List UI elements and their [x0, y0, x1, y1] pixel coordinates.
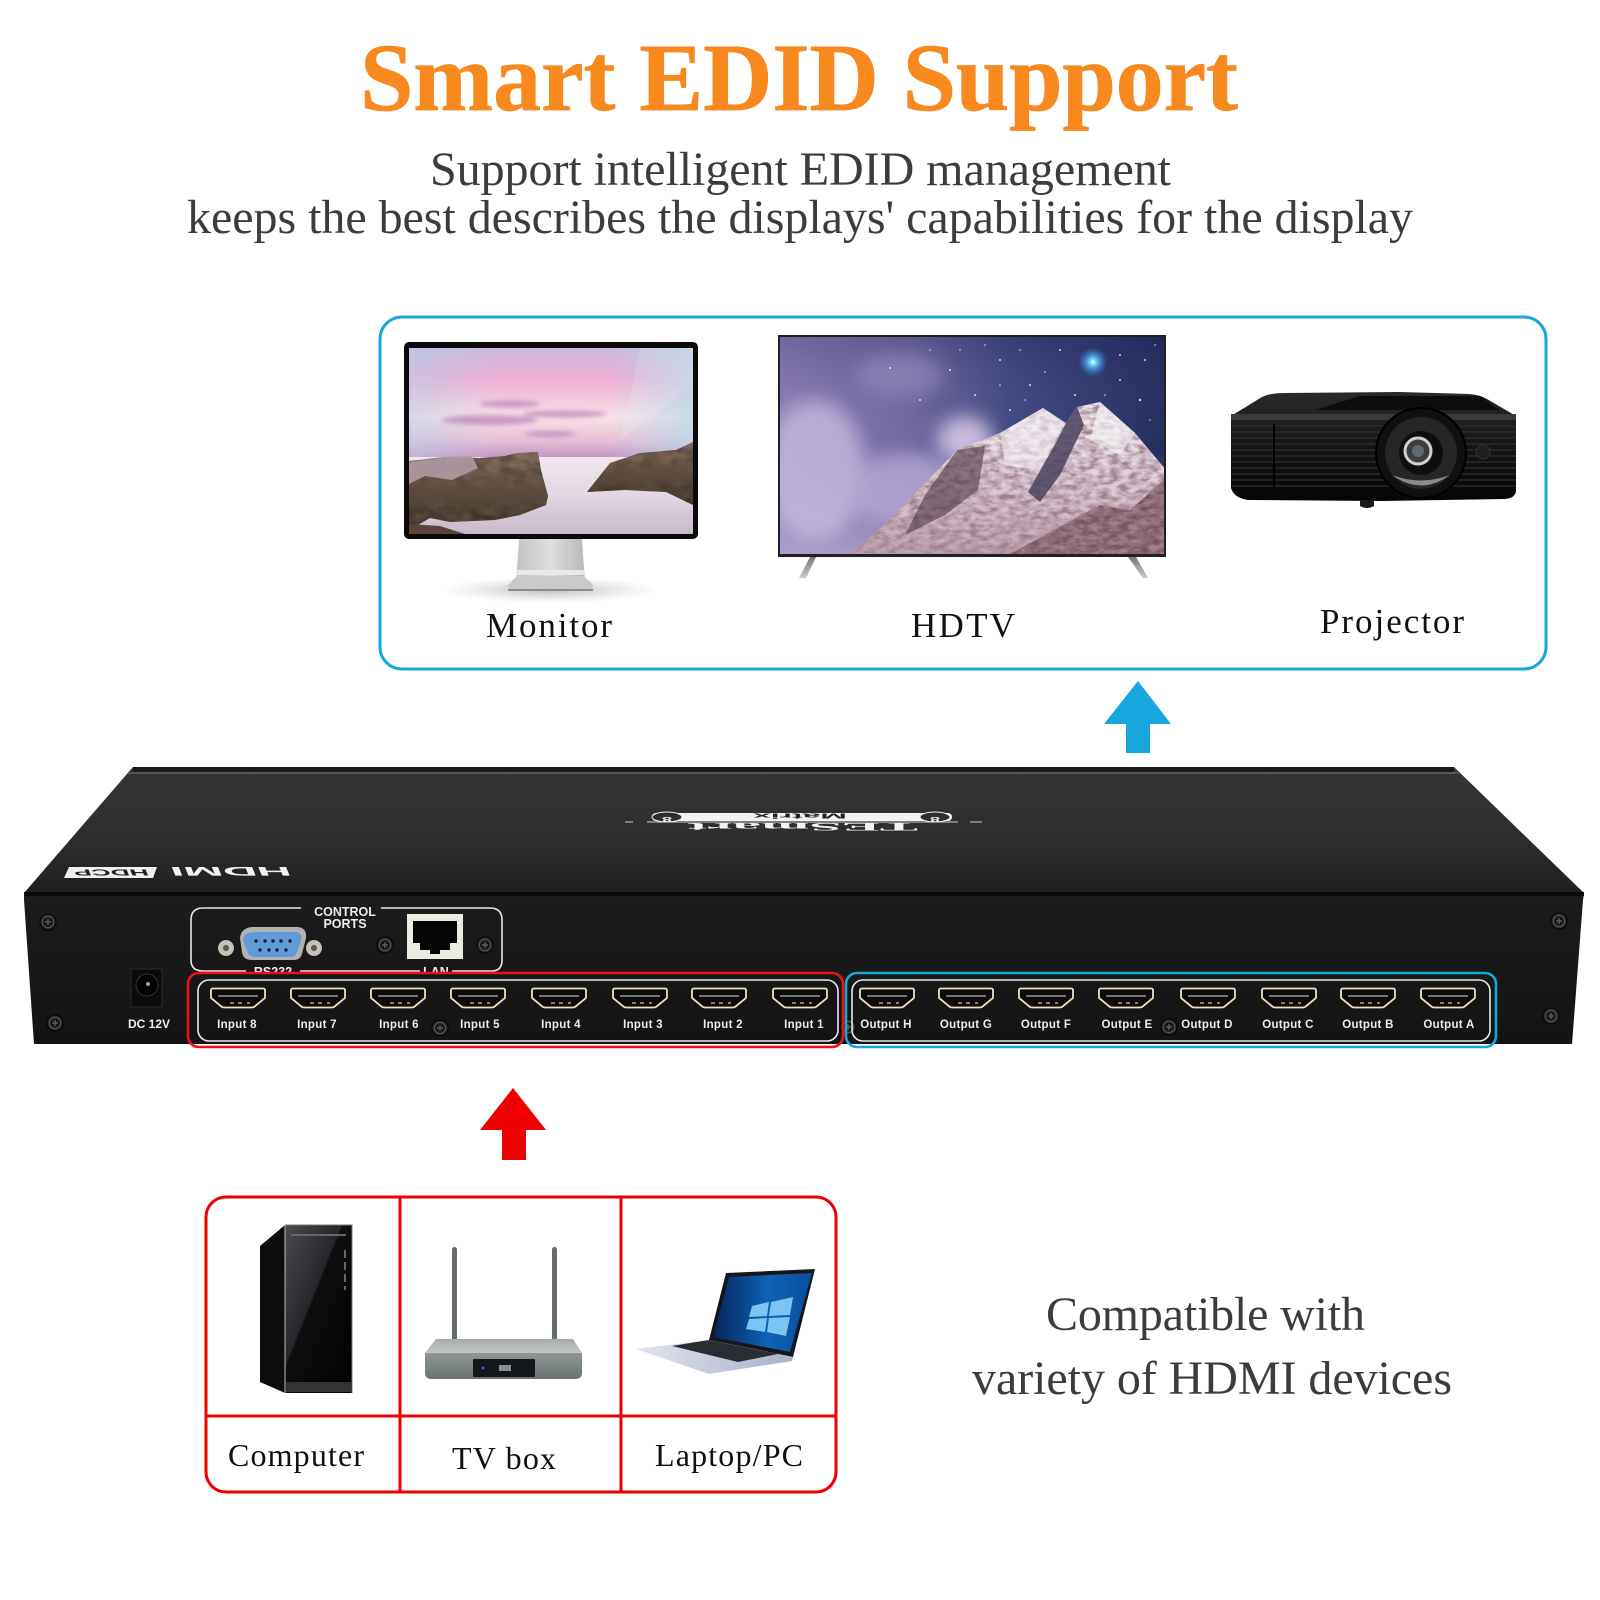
compatibility caption — [972, 1288, 1452, 1405]
input ports group: Input 3 — [623, 1019, 663, 1031]
icon: TV box — [425, 1247, 582, 1379]
arrow: red up — [480, 1088, 546, 1160]
top logo: TESmart Matrix: 8 — [929, 815, 940, 823]
input ports group: Input 8 — [217, 1019, 257, 1031]
DC power jack: DC 12V — [128, 1017, 170, 1031]
input ports group — [188, 973, 856, 1047]
top logo: TESmart Matrix: TESmart — [688, 820, 918, 833]
compatibility caption: variety of HDMI devices — [972, 1352, 1452, 1405]
panel: source devices — [206, 1197, 836, 1492]
control ports — [190, 907, 503, 972]
label: TV box: TV box — [452, 1440, 556, 1476]
label: Computer: Computer — [228, 1437, 364, 1473]
HDCP badge: HDCP — [72, 867, 150, 877]
control ports: LAN — [423, 965, 449, 979]
top logo: TESmart Matrix — [625, 812, 982, 833]
input ports group: Input 4 — [541, 1019, 581, 1031]
icon: computer tower — [260, 1225, 352, 1393]
HDMI matrix device — [24, 767, 1584, 1047]
icon: laptop — [636, 1269, 815, 1374]
output ports group: Output F — [1021, 1019, 1071, 1031]
LAN port — [407, 914, 463, 959]
panel: display devices — [380, 317, 1546, 669]
label: Monitor: Monitor — [486, 606, 612, 645]
subtitle text — [187, 143, 1413, 244]
label: Projector: Projector — [1320, 602, 1464, 641]
output ports group: Output G — [940, 1019, 992, 1031]
output ports group: Output H — [860, 1019, 912, 1031]
title: Smart EDID Support — [360, 24, 1238, 131]
arrow: blue up — [1104, 681, 1171, 753]
top logo: TESmart Matrix: Matrix — [753, 812, 847, 820]
control ports: CONTROL — [314, 905, 376, 919]
input ports group: Input 7 — [297, 1019, 337, 1031]
subtitle text: keeps the best describes the displays' capabilities for the display — [187, 191, 1413, 244]
RS232 port — [218, 927, 322, 960]
device top face — [24, 767, 1584, 893]
icon: monitor — [404, 342, 698, 603]
output ports group — [846, 973, 1496, 1047]
input ports group: Input 2 — [703, 1019, 743, 1031]
input ports group: Input 5 — [460, 1019, 500, 1031]
input ports group: Input 6 — [379, 1019, 419, 1031]
label: HDTV: HDTV — [911, 606, 1015, 645]
device front face — [24, 892, 1584, 1047]
output ports group: Output B — [1342, 1019, 1394, 1031]
control ports: PORTS — [323, 917, 367, 931]
output ports group: Output C — [1262, 1019, 1314, 1031]
label: Laptop/PC: Laptop/PC — [655, 1437, 803, 1473]
output ports group: Output A — [1423, 1019, 1475, 1031]
top logo: TESmart Matrix: 8 — [661, 815, 672, 823]
subtitle text: Support intelligent EDID management — [430, 143, 1172, 196]
control ports: RS232 — [254, 965, 292, 979]
input ports group: Input 1 — [784, 1019, 824, 1031]
icon: HDTV — [765, 335, 1166, 578]
output ports group: Output D — [1181, 1019, 1233, 1031]
DC power jack — [128, 969, 170, 1031]
compatibility caption: Compatible with — [1046, 1288, 1365, 1341]
icon: projector — [1231, 392, 1516, 508]
HDMI logo: HDMI — [168, 864, 294, 878]
output ports group: Output E — [1102, 1019, 1152, 1031]
